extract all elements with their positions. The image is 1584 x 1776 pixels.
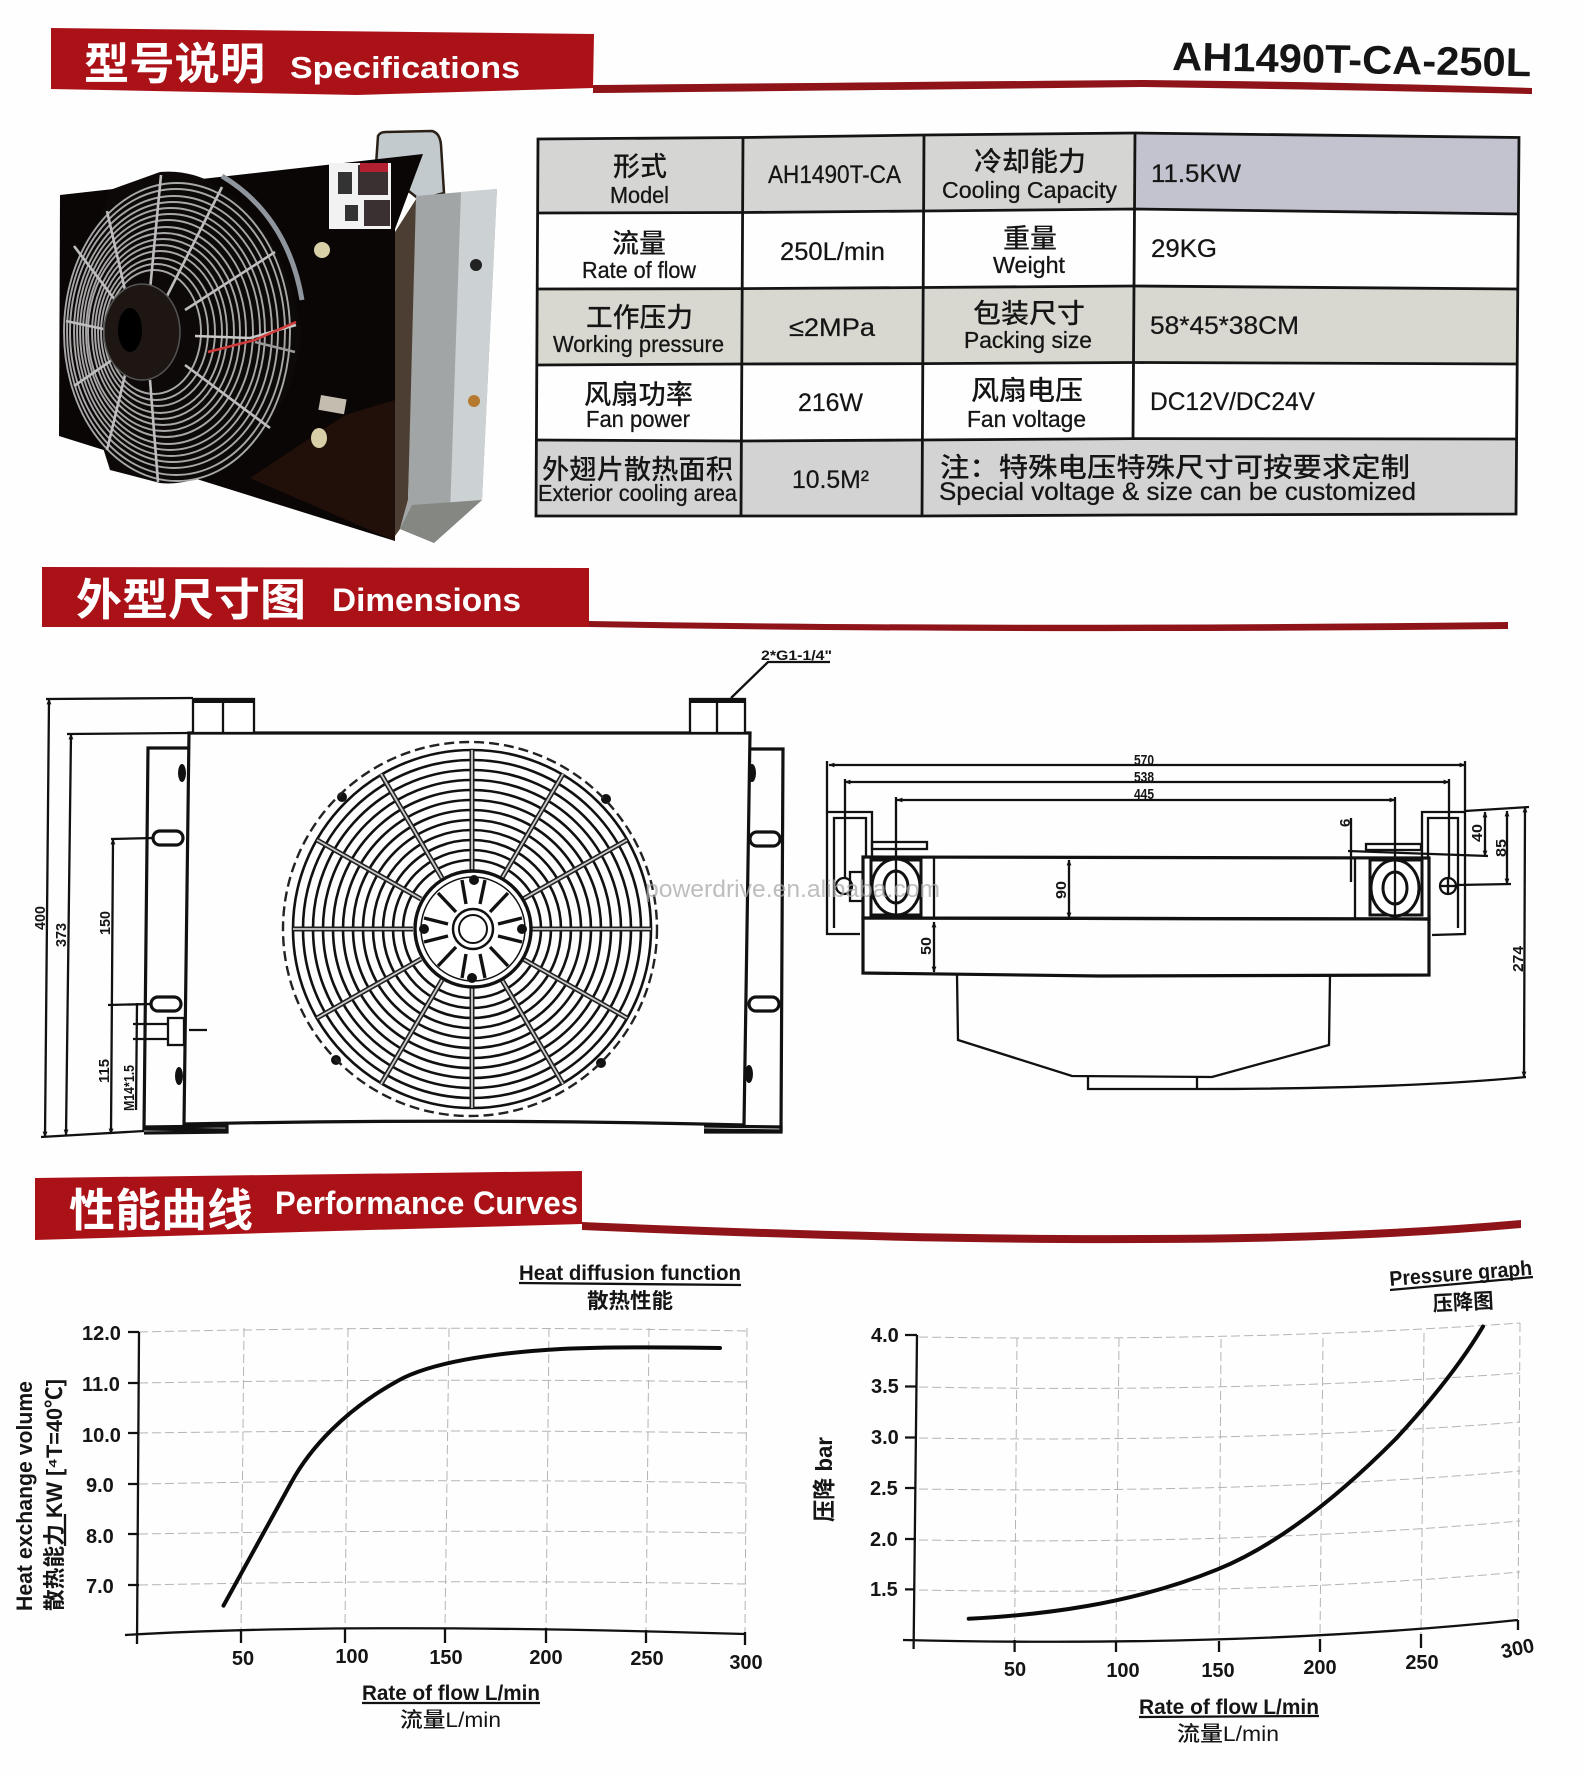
chart title: Heat diffusion function <box>519 1262 741 1285</box>
x axis title: Rate of flow L/min <box>1139 1696 1319 1719</box>
dimension labels left: 400 <box>32 906 49 930</box>
fan shroud <box>957 975 1330 1077</box>
x axis tick labels: 300 <box>729 1652 763 1674</box>
y axis tick labels: 9.0 <box>86 1475 114 1497</box>
x axis tick labels: 300 <box>1499 1635 1536 1663</box>
dimension labels side view <box>918 752 1527 972</box>
mounting bolts <box>311 242 330 448</box>
x axis tick labels <box>1004 1635 1536 1682</box>
y axis tick labels: 3.5 <box>871 1376 899 1398</box>
row 2: flow and weight <box>582 224 1217 283</box>
x axis tick labels: 100 <box>335 1646 369 1668</box>
mounting holes <box>836 872 1456 901</box>
x axis tick labels: 200 <box>1303 1657 1337 1679</box>
row 1: model and cooling capacity: AH1490T-CA <box>768 161 901 189</box>
dimension labels side view: 85 <box>1493 839 1510 857</box>
x axis tick labels <box>232 1646 763 1674</box>
table grid lines <box>536 133 1519 516</box>
x axis title <box>1139 1696 1319 1746</box>
vertical dimension lines <box>41 698 193 1137</box>
row 2: flow and weight: Weight <box>993 252 1066 278</box>
chart title <box>519 1262 741 1313</box>
row 3: working pressure and packing size: 包装尺寸 <box>973 299 1085 329</box>
inlet callout: 2*G1-1/4" <box>731 647 832 698</box>
row 4: fan power and fan voltage: 风扇功率 <box>584 380 693 410</box>
dimension labels side view: 538 <box>1134 769 1154 786</box>
body outline <box>184 733 750 1125</box>
heading: Dimensions banner: Dimensions <box>332 582 521 618</box>
x axis title: 流量L/min <box>400 1709 501 1732</box>
heading: Dimensions banner <box>42 567 1508 631</box>
heading: Performance Curves banner <box>35 1171 1521 1243</box>
row 2: flow and weight: 流量 <box>612 229 666 259</box>
dimension labels left <box>32 906 138 1111</box>
bolts <box>175 764 756 1085</box>
row 4: fan power and fan voltage: 风扇电压 <box>971 376 1083 406</box>
warning labels <box>329 163 391 229</box>
row 5: exterior cooling area and note: 注：特殊电压特殊尺寸可按要求定制 <box>940 453 1410 483</box>
right hose fitting <box>1370 860 1422 916</box>
chart title: 压降图 <box>1432 1290 1494 1316</box>
specifications table <box>536 133 1519 516</box>
row 2: flow and weight: Rate of flow <box>582 257 696 283</box>
y axis title: 散热能力 KW [⁴T=40℃] <box>42 1379 67 1611</box>
row 5: exterior cooling area and note: Special voltage & size can be customized <box>939 478 1416 506</box>
dimension labels left: 373 <box>53 923 70 947</box>
axes and ticks <box>903 1335 1518 1652</box>
dimension labels left: 115 <box>96 1059 113 1083</box>
y axis tick labels: 10.0 <box>82 1425 121 1447</box>
x axis tick labels: 250 <box>630 1648 664 1670</box>
y axis tick labels <box>870 1325 899 1601</box>
mounting slots <box>151 831 780 1011</box>
row 4: fan power and fan voltage: DC12V/DC24V <box>1150 388 1315 416</box>
core and tank outline <box>863 857 1429 976</box>
y axis tick labels: 4.0 <box>871 1325 899 1347</box>
fan wires <box>195 322 296 352</box>
row 1: model and cooling capacity: Cooling Capacity <box>942 177 1117 203</box>
left hose fitting <box>871 859 921 915</box>
chart: heat diffusion function <box>12 1262 763 1732</box>
row 2: flow and weight: 重量 <box>1003 224 1057 254</box>
row 3: working pressure and packing size: 工作压力 <box>586 303 693 333</box>
row 2: flow and weight: 29KG <box>1151 235 1217 263</box>
y axis tick labels: 3.0 <box>871 1427 899 1449</box>
dimension labels side view: 6 <box>1337 819 1354 827</box>
row 1: model and cooling capacity: Model <box>610 182 669 208</box>
inlet callout: 2*G1-1/4": 2*G1-1/4" <box>761 647 832 663</box>
mounting brackets <box>827 812 1465 935</box>
row 4: fan power and fan voltage: 216W <box>798 389 863 417</box>
x axis tick labels: 50 <box>1004 1659 1026 1681</box>
heading: Performance Curves banner: Performance Curves <box>275 1185 578 1221</box>
performance curve <box>224 1347 720 1606</box>
small port on the left side <box>133 1018 207 1045</box>
heading: Specifications banner <box>51 28 1532 95</box>
y axis tick labels: 2.5 <box>870 1478 898 1500</box>
row 1: model and cooling capacity: 形式 <box>613 152 667 182</box>
cooler black body <box>59 154 423 541</box>
side mounting plate <box>400 189 497 543</box>
row 3: working pressure and packing size: Working pressure <box>553 331 724 357</box>
heading: Dimensions banner: 外型尺寸图 <box>76 576 306 625</box>
chart title <box>1389 1257 1533 1316</box>
row 5: exterior cooling area and note: 外翅片散热面积 <box>542 455 733 485</box>
heading: Specifications banner: Specifications <box>290 50 520 85</box>
row 4: fan power and fan voltage: Fan voltage <box>967 406 1086 432</box>
y axis title <box>12 1379 67 1611</box>
dimension labels side view: 90 <box>1053 881 1070 899</box>
y axis tick labels: 7.0 <box>86 1576 114 1598</box>
y axis tick labels <box>82 1323 121 1598</box>
model number title: AH1490T-CA-250L <box>1172 35 1532 85</box>
x axis title <box>362 1682 540 1732</box>
y axis tick labels: 1.5 <box>870 1579 898 1601</box>
row 4: fan power and fan voltage <box>584 376 1315 432</box>
motor nub and curve <box>1088 1077 1526 1089</box>
row 3: working pressure and packing size: Packing size <box>964 327 1092 353</box>
x axis tick labels: 150 <box>429 1647 463 1669</box>
x axis tick labels: 200 <box>529 1647 563 1669</box>
y axis title: Heat exchange volume <box>12 1381 37 1611</box>
chart: pressure graph <box>811 1257 1536 1746</box>
pressure curve <box>969 1326 1483 1619</box>
heading: Performance Curves banner: 性能曲线 <box>69 1185 253 1236</box>
row 3: working pressure and packing size: ≤2MPa <box>789 314 875 342</box>
x axis title: Rate of flow L/min <box>362 1682 540 1705</box>
row 1: model and cooling capacity <box>610 147 1241 208</box>
front view dimension drawing <box>32 647 832 1137</box>
x axis title: 流量L/min <box>1177 1723 1279 1746</box>
row 3: working pressure and packing size <box>553 299 1299 357</box>
dimension labels left: M14*1.5 <box>121 1065 138 1111</box>
top fittings <box>193 699 745 733</box>
y axis tick labels: 12.0 <box>82 1323 121 1345</box>
dimension labels side view: 40 <box>1469 824 1486 842</box>
product photo: oil cooler with fan <box>59 131 497 543</box>
grid lines <box>919 1323 1520 1640</box>
row 4: fan power and fan voltage: Fan power <box>586 406 690 432</box>
dimension labels side view: 50 <box>918 937 935 955</box>
y axis tick labels: 8.0 <box>86 1526 114 1548</box>
row 3: working pressure and packing size: 58*45*38CM <box>1150 312 1299 340</box>
y axis tick labels: 2.0 <box>870 1529 898 1551</box>
fan guard <box>64 172 302 483</box>
horizontal and vertical dimension lines <box>827 761 1529 1077</box>
grid lines <box>139 1328 747 1632</box>
row 1: model and cooling capacity: 11.5KW <box>1151 160 1241 188</box>
dimension labels left: 150 <box>97 911 114 935</box>
x axis tick labels: 250 <box>1405 1652 1439 1674</box>
inlet fitting <box>376 131 444 200</box>
x axis tick labels: 50 <box>232 1648 254 1670</box>
chart title: Pressure graph <box>1389 1257 1533 1291</box>
side view dimension drawing <box>827 752 1529 1089</box>
chart title: 散热性能 <box>587 1290 673 1313</box>
dimension labels side view: 445 <box>1134 786 1154 803</box>
row 5: exterior cooling area and note <box>538 453 1416 506</box>
fan guard <box>283 742 657 1116</box>
motor hub <box>415 871 531 987</box>
dimension labels side view: 274 <box>1510 945 1527 972</box>
x axis tick labels: 100 <box>1106 1660 1140 1682</box>
y axis title: 压降 bar <box>811 1437 837 1522</box>
row 2: flow and weight: 250L/min <box>780 238 885 266</box>
axes and ticks <box>125 1332 745 1645</box>
y axis tick labels: 11.0 <box>82 1374 120 1396</box>
dimension labels side view: 570 <box>1134 752 1154 769</box>
row 5: exterior cooling area and note: 10.5M² <box>792 466 869 494</box>
watermark: powerdrive.en.alibaba.com <box>645 876 940 903</box>
row 1: model and cooling capacity: 冷却能力 <box>974 147 1086 177</box>
x axis tick labels: 150 <box>1201 1660 1235 1682</box>
heading: Specifications banner: 型号说明 <box>84 40 265 89</box>
mounting plates and feet <box>144 748 783 1133</box>
row 5: exterior cooling area and note: Exterior cooling area <box>538 480 737 506</box>
table row fills <box>536 133 1519 516</box>
